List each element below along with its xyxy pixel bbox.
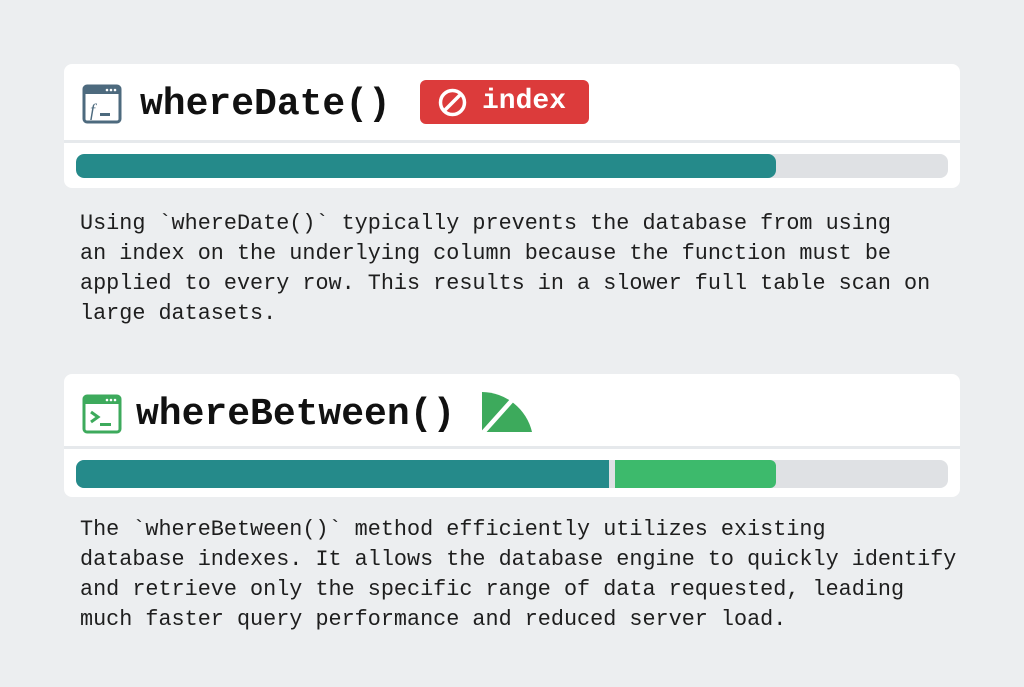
bar: whereDate performance (76, 154, 948, 178)
badge: no index (420, 80, 589, 124)
icon: speed gauge (482, 392, 532, 432)
text: whereDate description: Using `whereDate()` typically prevents the database from using an index on the underlying column because the function must be applied to every row. This results in a slower full table scan on large datasets. (80, 211, 930, 326)
panel: whereBetween (64, 374, 960, 497)
heading: whereBetween(): whereBetween() (136, 393, 455, 436)
badge: no index: index (482, 86, 566, 117)
icon: terminal window (82, 394, 122, 434)
icon: function window (82, 84, 122, 124)
icon: function window: f (90, 100, 98, 120)
text: whereBetween description: The `whereBetween()` method efficiently utilizes existing database indexes. It allows the database engine to quickly identify and retrieve only the specific range of data requested, leading much faster query performance and reduced server load. (80, 517, 956, 632)
bar: whereBetween performance (76, 460, 948, 488)
heading: whereDate(): whereDate() (140, 83, 391, 126)
panel: whereDate (64, 64, 960, 188)
